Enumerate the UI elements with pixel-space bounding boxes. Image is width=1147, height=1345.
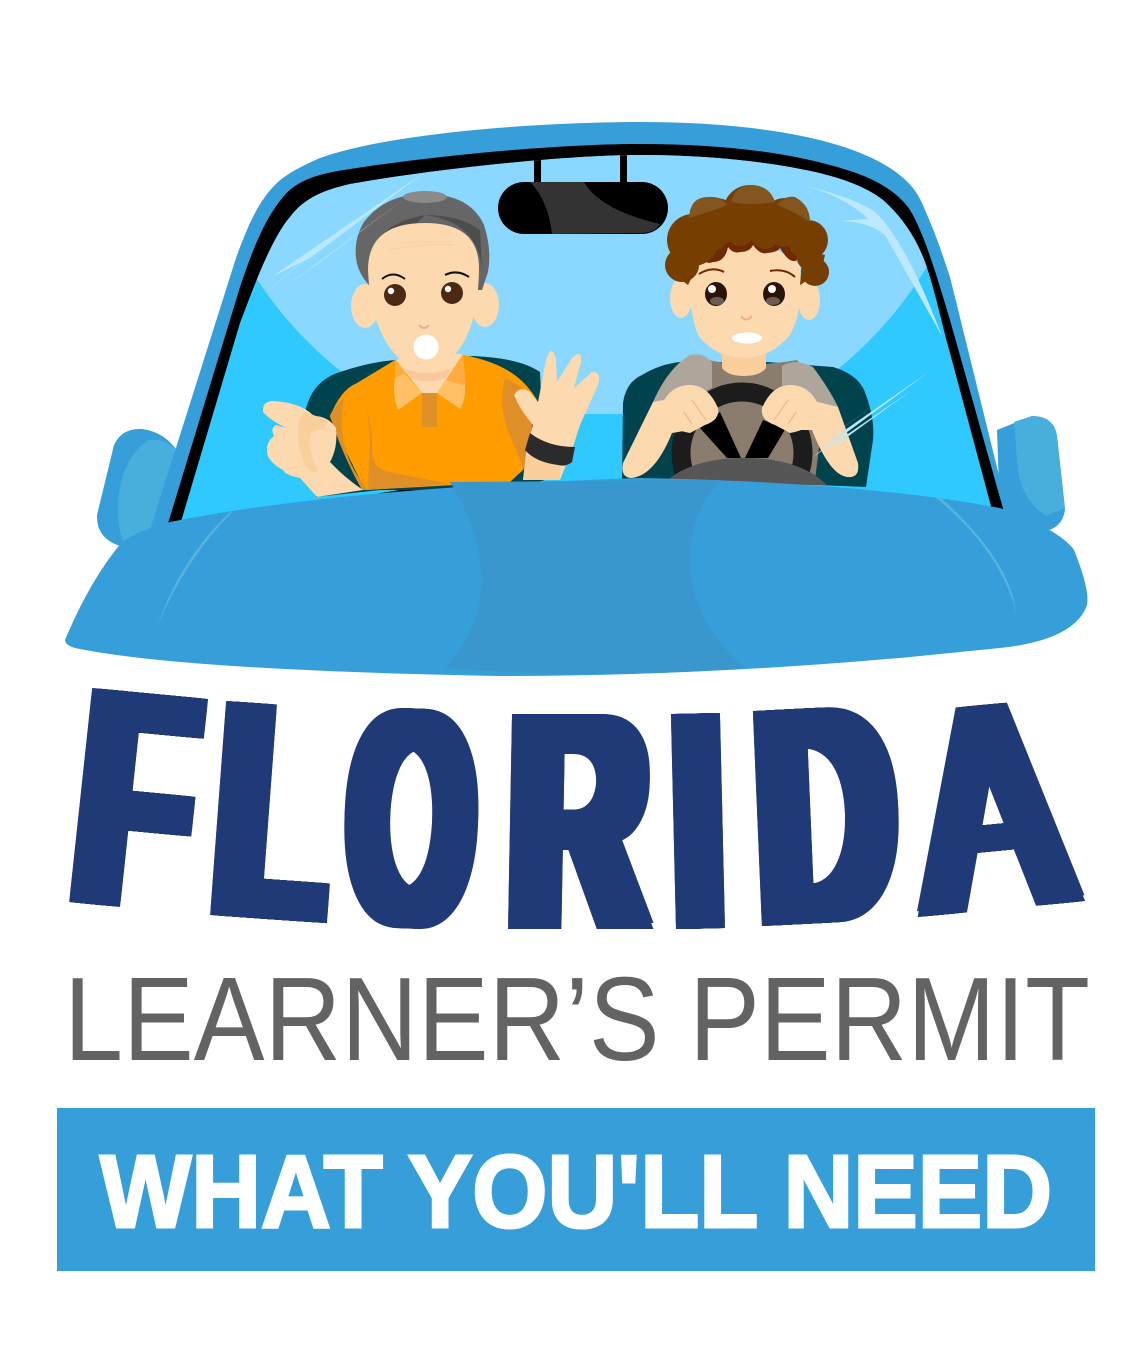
driver face: [689, 242, 801, 358]
driver eyes: [699, 269, 795, 306]
title: FLORIDA: D: [740, 643, 889, 990]
title: FLORIDA: F: [52, 626, 198, 975]
hood highlights: [158, 497, 1016, 625]
instructor nose: [419, 325, 429, 328]
windshield glare left: [254, 170, 428, 302]
title: FLORIDA: A: [893, 641, 1064, 977]
figure: student driver: [622, 185, 873, 514]
title: FLORIDA: R: [496, 653, 638, 993]
driver arms and hands: [622, 385, 858, 478]
driver ears: [670, 278, 820, 320]
instructor mouth: [414, 334, 438, 360]
title: FLORIDA: O: [334, 648, 470, 991]
windshield trim: [166, 144, 1004, 530]
windshield glare lower right: [812, 371, 930, 458]
instructor ears: [351, 283, 499, 328]
instructor shirt: [330, 354, 537, 490]
driver torso: [674, 360, 820, 476]
driver finger creases: [684, 400, 796, 424]
windshield glass: [182, 155, 991, 520]
driver sleeves: [653, 354, 838, 411]
instructor raised hand: [514, 351, 599, 480]
car roof frame: [150, 122, 1010, 530]
title: FLORIDA: L: [195, 639, 330, 985]
mirror stems: [534, 155, 627, 182]
instructor eyes: [382, 272, 469, 306]
hood shading: [445, 480, 745, 674]
driver mouth: [732, 332, 762, 344]
driver nose: [741, 316, 752, 320]
driver neck: [722, 353, 766, 376]
driver seat: [622, 362, 873, 487]
title: FLORIDA: [52, 626, 1085, 993]
instructor neck and collar: [394, 374, 422, 410]
instructor pointing hand: [263, 401, 363, 497]
rear view mirror: [498, 182, 668, 234]
car hood: [65, 478, 1087, 676]
figure: instructor: [263, 191, 599, 497]
driver hair: [665, 185, 829, 286]
instructor wristwatch: [525, 433, 575, 466]
windshield glare top right: [804, 186, 942, 336]
instructor hair: [356, 194, 489, 290]
banner heading: WHAT YOU'LL NEED: [100, 1134, 1052, 1249]
title: FLORIDA: I: [660, 652, 716, 993]
instructor seat: [304, 356, 545, 497]
icon: left side mirror: [97, 429, 178, 546]
car illustration: [65, 122, 1088, 676]
steering wheel: [669, 382, 827, 485]
icon: right side mirror: [997, 416, 1065, 532]
instructor face: [368, 223, 479, 370]
banner background: [57, 1108, 1095, 1271]
